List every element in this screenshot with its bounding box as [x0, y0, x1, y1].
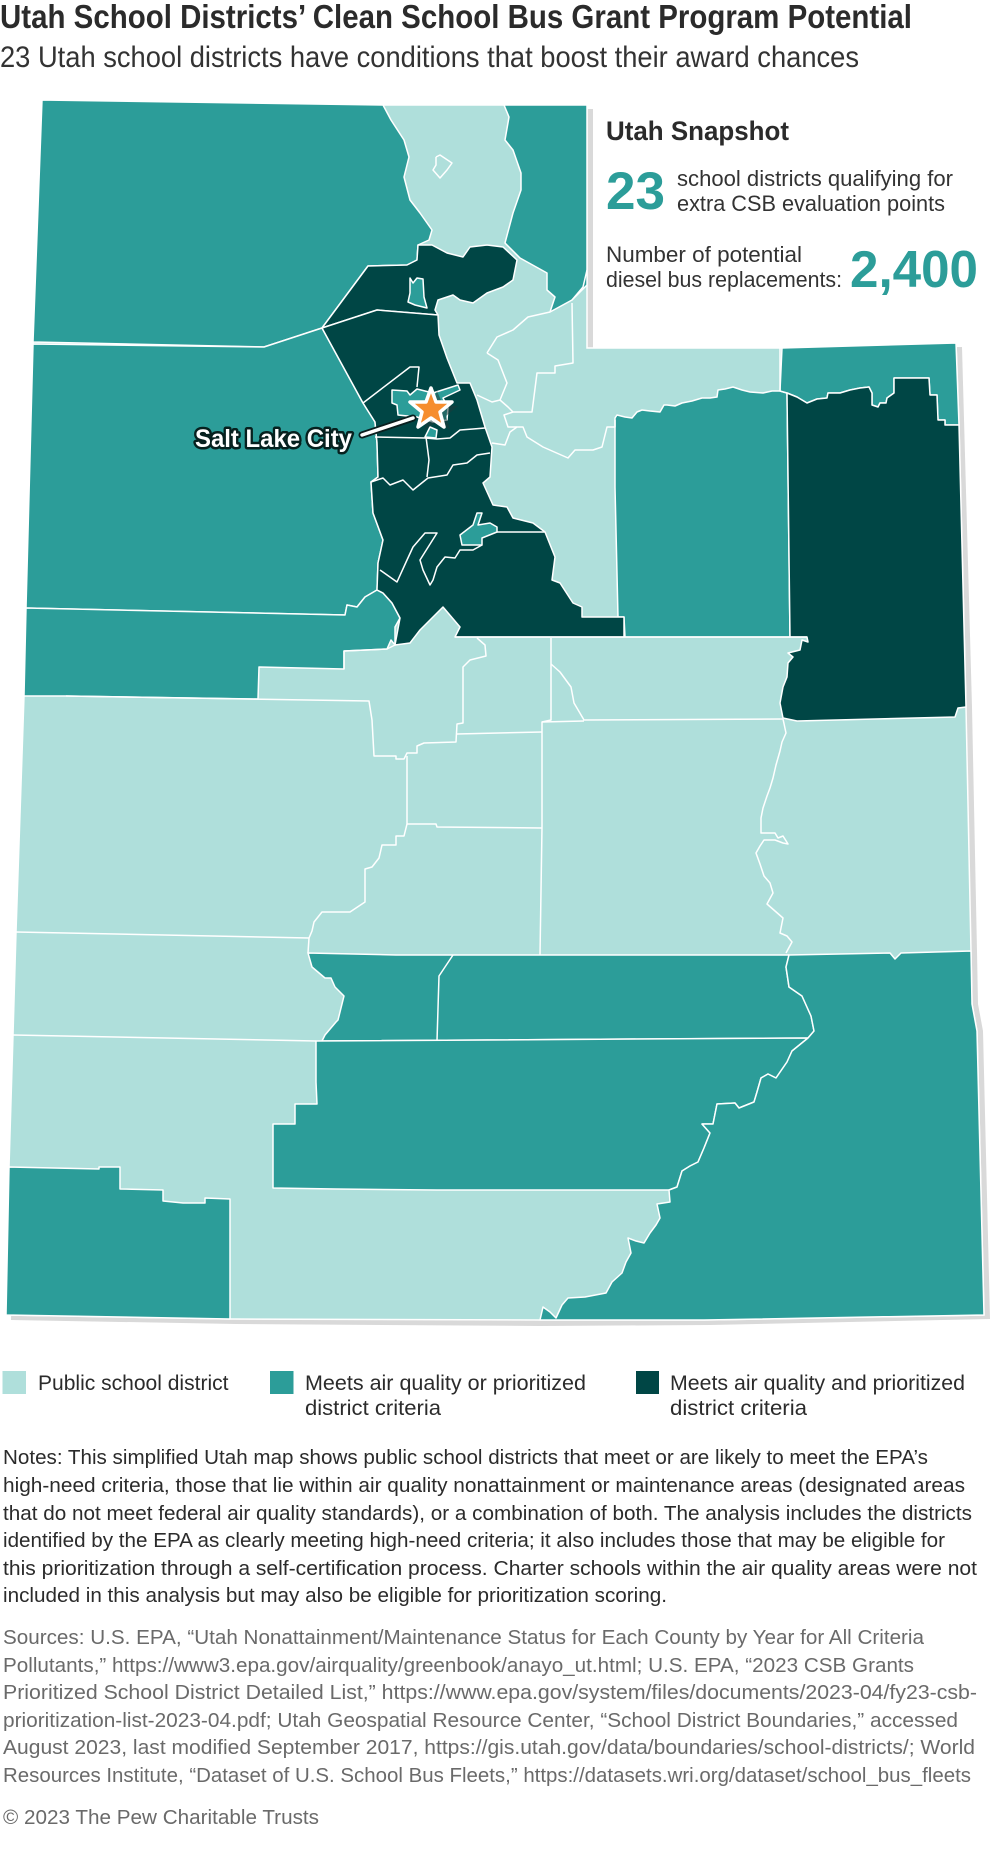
- notes: Notes: This simplified Utah map shows public school districts that meet or are likely to meet the EPA’s: [3, 1447, 928, 1469]
- sources: August 2023, last modified September 2017, https://gis.utah.gov/data/boundaries/school-districts/; World: [3, 1737, 975, 1759]
- district: north central: [322, 245, 517, 328]
- legend item: air quality or prioritized: district criteria: [305, 1396, 441, 1420]
- legend item: air quality or prioritized: Meets air quality or prioritized: [305, 1371, 586, 1395]
- stat: 23 districts: 23: [606, 162, 665, 221]
- base: public school districts: [6, 100, 984, 1320]
- district: central east: [615, 387, 790, 637]
- sources: Pollutants,” https://www3.epa.gov/airquality/greenbook/anayo_ut.html; U.S. EPA, “2023 CSB Grants: [3, 1655, 914, 1677]
- inset: northern enclave: [408, 278, 427, 308]
- subtitle: 23 Utah school districts have conditions that boost their award chances: [0, 41, 859, 74]
- teal inset districts: [392, 278, 497, 545]
- district: northeast: [780, 343, 959, 425]
- sources: Sources: U.S. EPA, “Utah Nonattainment/Maintenance Status for Each County by Year for All Criteria: [3, 1627, 925, 1649]
- district: Uintah basin: [780, 378, 966, 721]
- map: Utah school districts: [6, 100, 990, 1326]
- notes: [3, 1447, 977, 1607]
- district: lower west: [24, 590, 400, 699]
- sources: Resources Institute, “Dataset of U.S. School Bus Fleets,” https://datasets.wri.org/dataset/school_bus_fleets: [3, 1765, 971, 1787]
- map shadow: [11, 104, 990, 1326]
- snapshot heading: Utah Snapshot: [606, 116, 789, 146]
- district boundary lines: [13, 155, 807, 1041]
- label: Salt Lake City: Salt Lake City: [195, 425, 352, 453]
- sources: Prioritized School District Detailed List,” https://www.epa.gov/system/files/documents/2023-04/fy23-csb-: [3, 1682, 977, 1704]
- stat description: replacements: diesel bus replacements:: [606, 267, 842, 292]
- inset: small enclave: [425, 427, 437, 438]
- copyright: © 2023 The Pew Charitable Trusts: [3, 1807, 319, 1829]
- stat description: districts: school districts qualifying for: [677, 166, 953, 191]
- teal districts: [6, 100, 984, 1320]
- district: northwest: [33, 100, 432, 347]
- legend item: air quality and prioritized: district criteria: [670, 1396, 807, 1420]
- district: southwest: [6, 1167, 230, 1319]
- district: south central west: [308, 953, 814, 1041]
- notes: high-need criteria, those that lie within air quality nonattainment or maintenance areas (designated areas: [3, 1475, 965, 1497]
- sources: [3, 1627, 977, 1787]
- district: wasatch front and central: [322, 310, 624, 645]
- legend item: air quality or prioritized: [270, 1371, 586, 1420]
- district: south central: [273, 1038, 808, 1190]
- stat: 2,400: 2,400: [850, 241, 978, 299]
- notes: this prioritization through a self-certification process. Charter schools within the air quality areas were not: [3, 1558, 977, 1580]
- legend: [2, 1371, 965, 1420]
- inset: central enclave: [460, 513, 497, 545]
- legend item: air quality and prioritized: Meets air quality and prioritized: [670, 1371, 965, 1395]
- notes: that do not meet federal air quality standards), or a combination of both. The analysis includes the districts: [3, 1503, 972, 1525]
- notes: included in this analysis but may also be eligible for prioritization scoring.: [3, 1585, 667, 1607]
- district: west: [26, 328, 383, 615]
- stat description: replacements: Number of potential: [606, 242, 802, 267]
- inset: Salt Lake City district: [392, 385, 460, 422]
- leader line: Salt Lake City: [362, 418, 413, 435]
- stat description: districts: extra CSB evaluation points: [677, 191, 945, 216]
- dark districts: [322, 245, 966, 721]
- panel: Utah snapshot: [606, 116, 978, 299]
- legend item: public school district: Public school district: [38, 1371, 229, 1395]
- district: southeast: [540, 951, 984, 1320]
- stat description: replacements: [606, 242, 842, 292]
- stat description: districts: [677, 166, 953, 216]
- legend item: air quality and prioritized: [636, 1371, 965, 1420]
- notes: identified by the EPA as clearly meeting high-need criteria; it also includes those that may be eligible for: [3, 1530, 945, 1552]
- sources: prioritization-list-2023-04.pdf; Utah Geospatial Resource Center, “School District Boundaries,” accessed: [3, 1710, 958, 1732]
- marker: Salt Lake City star: [410, 388, 458, 430]
- district: north east corner: [504, 105, 587, 312]
